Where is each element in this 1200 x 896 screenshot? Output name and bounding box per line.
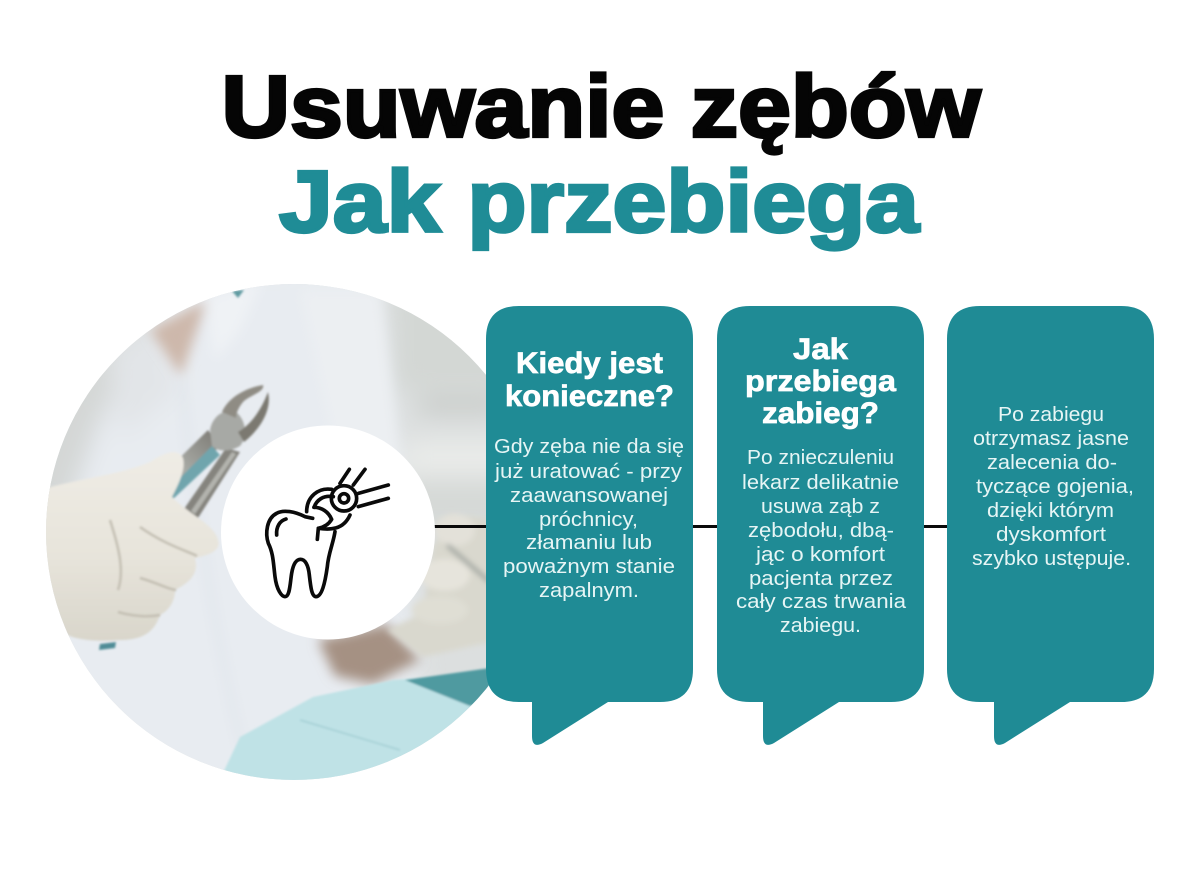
body text: Gdy zęba nie da się xyxy=(494,435,684,458)
body text: szybko ustępuje. xyxy=(972,547,1131,570)
photo: teal drape xyxy=(224,289,489,780)
heading: Kiedy jest xyxy=(516,347,663,380)
body text: otrzymasz jasne xyxy=(973,427,1129,450)
body text: złamaniu lub xyxy=(526,531,652,554)
title line 1: Usuwanie zębów xyxy=(222,58,981,156)
body text: pacjenta przez xyxy=(749,567,893,590)
connector lines xyxy=(430,525,950,528)
body text: usuwa ząb z xyxy=(761,495,880,518)
panel: Kiedy jest konieczne xyxy=(486,306,693,745)
body text: zalecenia do- xyxy=(987,451,1117,474)
panel: Jak przebiega zabieg xyxy=(717,306,924,745)
panel: Po zabiegu xyxy=(947,306,1154,745)
title line 2: Jak przebiega xyxy=(279,154,920,250)
body text: Po zabiegu xyxy=(998,403,1104,426)
body text: próchnicy, xyxy=(539,508,638,531)
photo: right hand with instrument xyxy=(387,516,486,656)
body text: dyskomfort xyxy=(996,523,1106,546)
speech bubble xyxy=(486,306,693,745)
body text xyxy=(972,403,1134,570)
body text: zaawansowanej xyxy=(510,484,668,507)
white icon circle xyxy=(221,426,435,640)
heading xyxy=(745,333,896,430)
photo: wrist xyxy=(318,624,420,684)
photo: gloved hand xyxy=(40,452,219,641)
body text: zapalnym. xyxy=(539,579,639,602)
heading: konieczne? xyxy=(505,380,674,413)
body text xyxy=(736,446,907,637)
heading xyxy=(505,347,674,413)
photo: dentist holding forceps xyxy=(46,284,489,780)
body text: cały czas trwania xyxy=(736,590,907,613)
body text: dzięki którym xyxy=(987,499,1114,522)
heading: zabieg? xyxy=(762,397,879,430)
body text: poważnym stanie xyxy=(503,555,675,578)
heading: przebiega xyxy=(745,365,896,398)
heading: Jak xyxy=(793,333,848,366)
body text: tyczące gojenia, xyxy=(976,475,1134,498)
body text: już uratować - przy xyxy=(494,460,683,483)
speech bubble xyxy=(947,306,1154,745)
speech bubble xyxy=(717,306,924,745)
body text: jąc o komfort xyxy=(755,543,885,566)
body text: Po znieczuleniu xyxy=(747,446,894,469)
body text: lekarz delikatnie xyxy=(742,471,899,494)
title xyxy=(222,58,981,250)
body text: zębodołu, dbą- xyxy=(748,519,894,542)
icon: tooth with forceps xyxy=(267,469,388,597)
body text: zabiegu. xyxy=(780,614,861,637)
photo: forceps xyxy=(180,429,218,477)
body text xyxy=(494,435,684,602)
